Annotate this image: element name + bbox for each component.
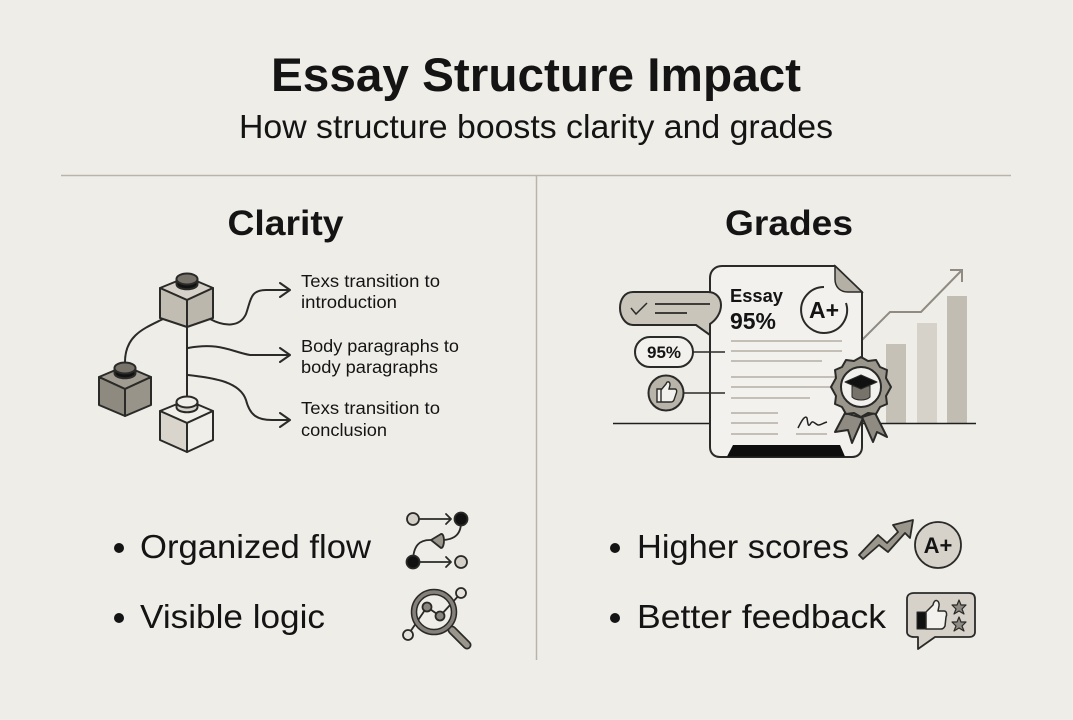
document xyxy=(710,266,862,457)
trend arrow xyxy=(862,270,962,340)
labels: transitions: body paragraphs xyxy=(301,357,438,377)
grade stamp xyxy=(801,287,847,333)
icon: top block xyxy=(160,274,213,327)
icon: light block xyxy=(160,396,213,452)
labels: transitions: conclusion xyxy=(301,420,387,440)
text lines xyxy=(731,341,842,434)
icon: rising arrow xyxy=(859,520,913,559)
icon: thumbs up xyxy=(648,376,725,410)
connector lines xyxy=(125,283,290,427)
icon: flow xyxy=(406,512,468,568)
bullet: organized flow: Organized flow xyxy=(140,528,371,565)
title: Essay Structure Impact xyxy=(271,48,801,101)
essay label: Essay xyxy=(730,285,784,306)
illustration: graded essay xyxy=(613,266,976,457)
score pill xyxy=(635,337,725,367)
comment bubble xyxy=(620,292,721,335)
icon: grade badge: A+ xyxy=(924,533,952,558)
panel: clarity xyxy=(99,204,468,645)
labels: transitions: Body paragraphs to xyxy=(301,336,459,356)
bullet: visible logic: Visible logic xyxy=(140,598,325,635)
signature xyxy=(798,417,827,428)
grade stamp: A+ xyxy=(809,297,839,323)
heading: grades: Grades xyxy=(725,204,853,243)
labels: transitions: Texs transition to xyxy=(301,398,440,418)
bullet: better feedback: Better feedback xyxy=(637,598,887,635)
diagram: connected blocks xyxy=(99,271,459,452)
essay score: 95% xyxy=(730,308,776,334)
icon: feedback bubble xyxy=(907,593,975,649)
icon: dark block xyxy=(99,362,151,416)
document fold xyxy=(835,266,862,292)
score pill: 95% xyxy=(647,343,681,362)
labels: transitions: introduction xyxy=(301,292,397,312)
heading: clarity: Clarity xyxy=(228,204,344,243)
document footer xyxy=(727,445,845,456)
labels: transitions xyxy=(301,271,459,440)
bullet: higher scores: Higher scores xyxy=(637,528,849,565)
award ribbon xyxy=(831,357,891,443)
icon: grade badge xyxy=(915,522,961,568)
bar chart xyxy=(886,296,967,423)
labels: transitions: Texs transition to xyxy=(301,271,440,291)
subtitle: How structure boosts clarity and grades xyxy=(239,108,833,145)
icon: magnifier xyxy=(403,588,467,645)
panel: grades xyxy=(610,204,976,649)
